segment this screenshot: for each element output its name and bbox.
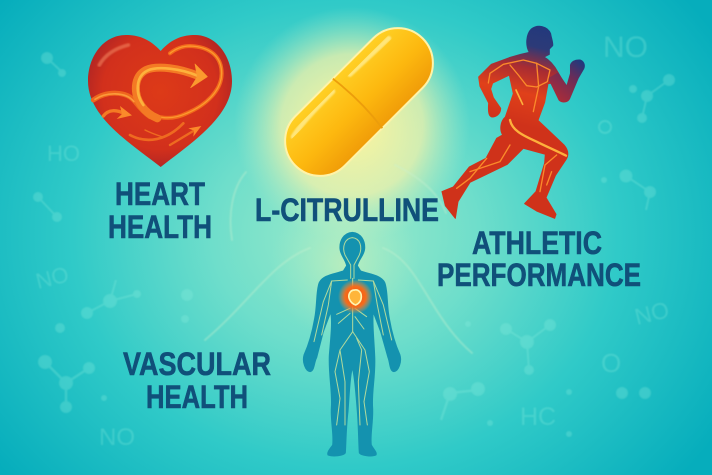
heart highlight	[99, 45, 128, 65]
heading: Athletic Performance	[437, 225, 641, 293]
body silhouette	[303, 232, 401, 456]
heading: Heart Health	[108, 176, 212, 245]
icon: heart with flow arrows	[88, 35, 232, 167]
heading: Vascular Health	[123, 346, 271, 415]
heading: Athletic Performance: PERFORMANCE	[437, 257, 641, 293]
label: NO right: NO	[632, 296, 672, 330]
runner silhouette	[442, 26, 568, 218]
label: NO bottom left: NO	[99, 424, 135, 451]
label: NO top right: NO	[603, 31, 648, 64]
label: O: O	[601, 348, 621, 378]
heart vessels	[93, 45, 222, 145]
molecule: upper left	[41, 52, 66, 77]
molecule: lower left upper	[55, 280, 193, 333]
runner vessels	[457, 60, 557, 192]
heading: Heart Health: HEART	[115, 176, 205, 212]
molecule: upper right	[629, 74, 675, 123]
runner front arm	[548, 60, 585, 102]
capsule highlights	[290, 37, 390, 137]
heading: Vascular Health: VASCULAR	[123, 346, 271, 382]
molecule: lower right	[465, 319, 556, 375]
label: HO left: HO	[47, 141, 80, 166]
heart body	[88, 35, 232, 167]
molecule: left middle	[33, 192, 62, 222]
label: NO left: NO	[33, 262, 71, 294]
molecule: right middle	[599, 121, 656, 210]
icon: human body circulatory figure	[303, 232, 401, 456]
heading: L-Citrulline: L-CITRULLINE	[255, 192, 439, 228]
capsule body	[271, 14, 447, 190]
heart glow	[338, 278, 373, 315]
heading: Vascular Health: HEALTH	[146, 379, 248, 415]
icon: L-citrulline capsule	[271, 14, 447, 190]
vessels	[314, 238, 392, 425]
runner bright vessels	[510, 90, 566, 156]
label: HC: HC	[520, 403, 556, 431]
icon: running athlete	[442, 26, 585, 218]
molecule: lower left	[38, 355, 107, 413]
molecule: bottom centre	[441, 382, 651, 437]
connector arcs	[205, 165, 472, 353]
heading: Heart Health: HEALTH	[108, 209, 212, 245]
capsule seam	[333, 77, 384, 128]
glowing heart	[349, 290, 361, 305]
heading: Athletic Performance: ATHLETIC	[472, 225, 602, 261]
arrow heads	[191, 64, 207, 88]
background molecules and chemical labels	[33, 31, 675, 451]
